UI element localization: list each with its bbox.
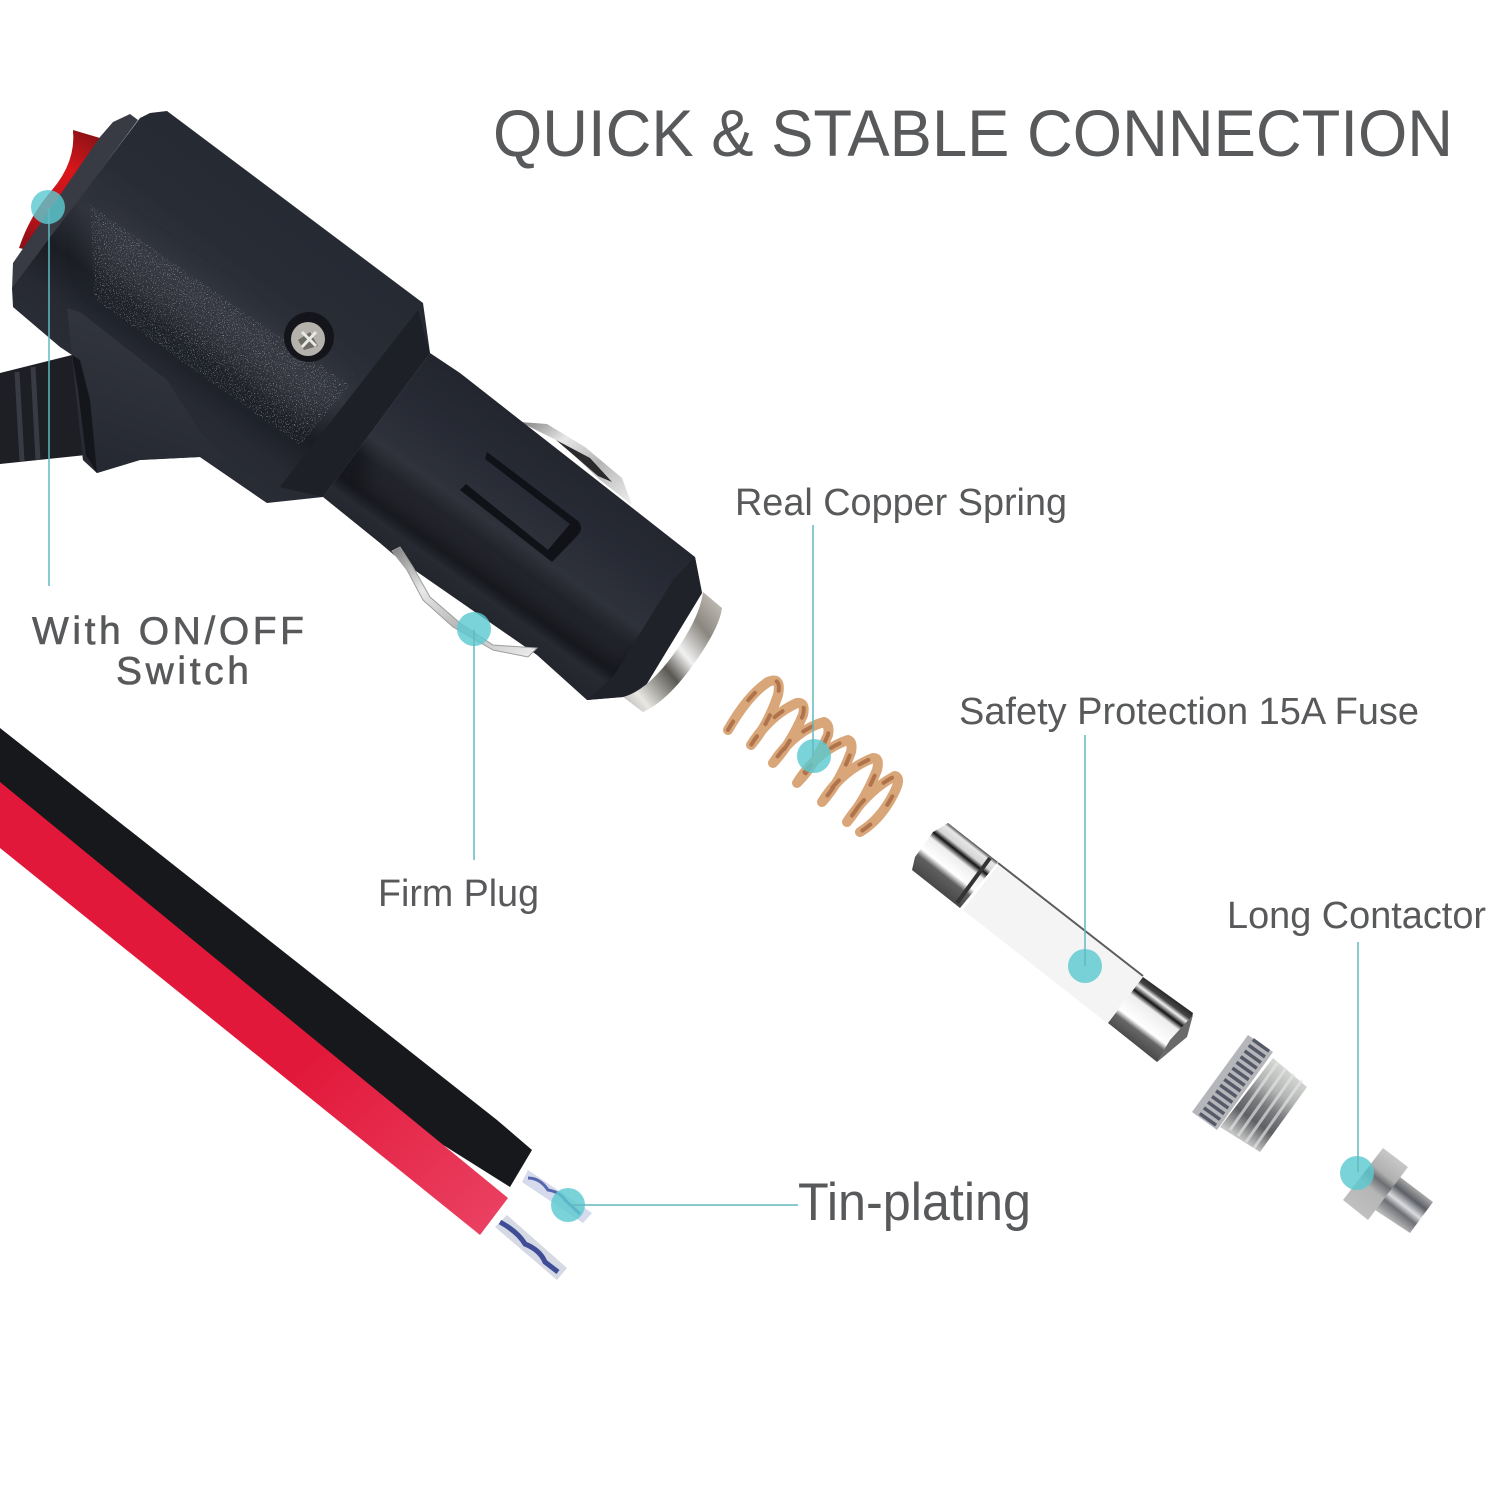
plug side slot [460,452,581,562]
cable strain relief [0,355,86,464]
left end cap [912,823,998,908]
callout: fuse [959,691,1419,983]
glass tube [963,865,1143,1023]
callout: tin-plating [551,1173,1031,1232]
switch bezel [12,114,138,290]
body highlight band [95,215,340,425]
screw [284,312,334,362]
illustration: threaded collar [1192,1035,1307,1152]
black wire [0,728,532,1187]
callout: on/off switch: With ON/OFF [32,610,304,653]
tinned strand upper [522,1170,592,1223]
nozzle chamfer [587,557,702,700]
title: QUICK & STABLE CONNECTION [493,96,1453,170]
contactor pin [1375,1177,1433,1233]
body speckle texture [90,205,350,445]
contactor head [1343,1148,1408,1220]
callout: on/off switch: Switch [116,650,249,693]
plug nozzle [323,353,702,700]
metal tip ring [623,592,722,712]
illustration: red and black wires [0,728,592,1280]
illustration: long contactor [1343,1148,1433,1233]
illustration: copper spring [728,681,898,832]
nozzle highlight [365,440,640,665]
thread body [1220,1058,1307,1152]
body shoulder [67,308,267,503]
callout: firm plug: Firm Plug [378,873,539,915]
body to nozzle band [280,310,430,497]
front metal clip [392,547,537,657]
red rocker switch [19,130,100,252]
red wire [0,782,508,1235]
illustration: cigarette lighter plug [0,111,722,712]
tinned strand lower [495,1215,567,1280]
callout: firm plug [378,612,539,915]
callout: fuse: Safety Protection 15A Fuse [959,691,1419,733]
right end cap [1108,977,1193,1062]
plug rear body [12,111,430,503]
knurled head [1192,1035,1273,1130]
callout: long contactor [1227,895,1486,1190]
callout: long contactor: Long Contactor [1227,895,1486,937]
illustration: fuse [912,823,1193,1062]
callout: real copper spring: Real Copper Spring [735,482,1067,524]
callout: tin-plating: Tin-plating [798,1173,1031,1232]
cable collar shade [72,355,97,473]
callout: real copper spring [735,482,1067,773]
callout: on/off switch [31,190,304,693]
rear metal clip [520,422,632,505]
